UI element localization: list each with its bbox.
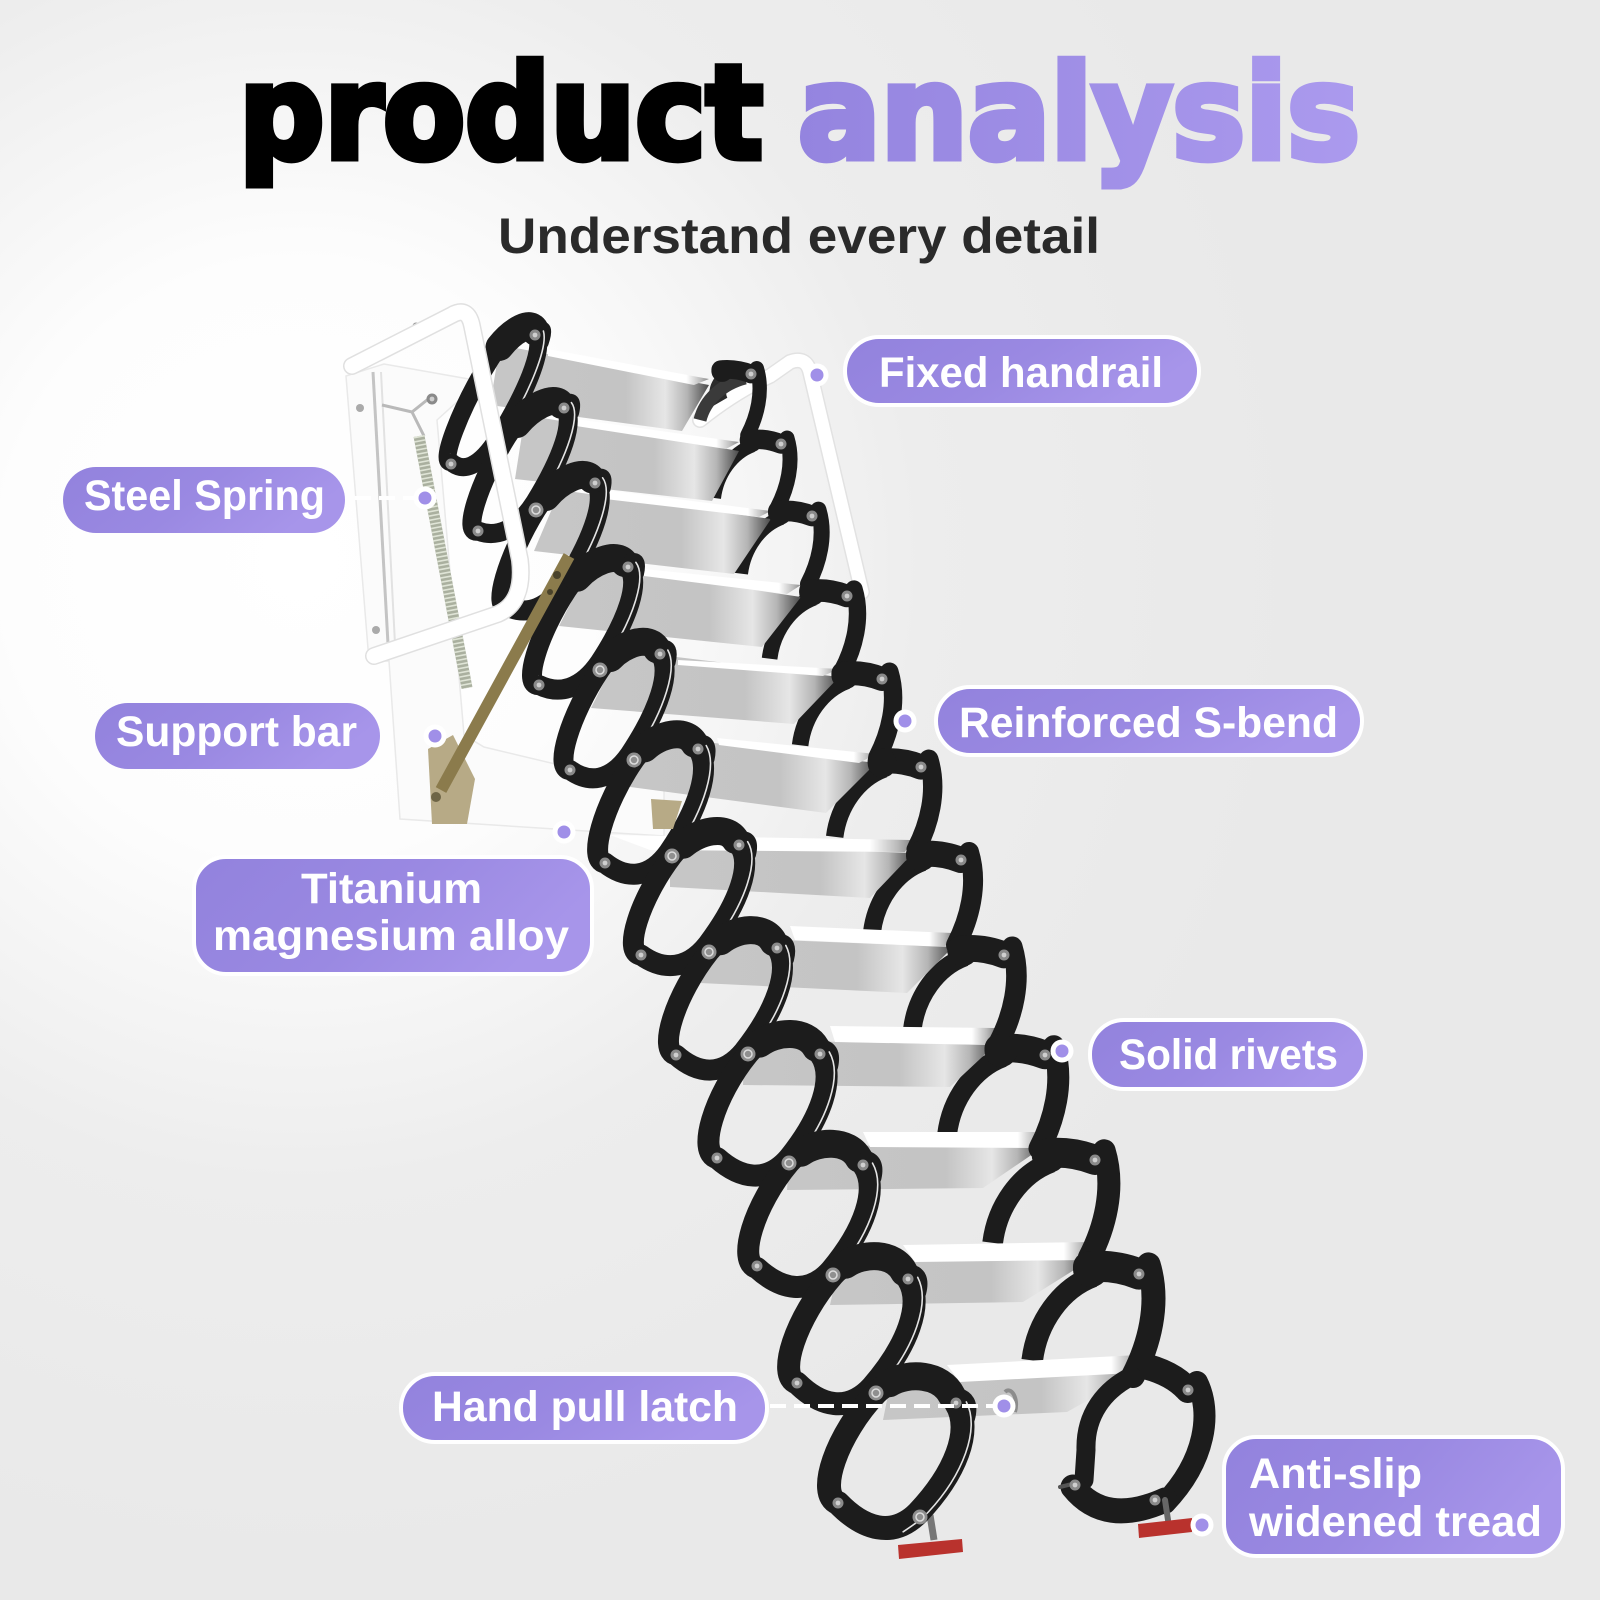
title: product	[239, 37, 763, 189]
marker: Fixed handrail	[808, 366, 826, 384]
ladder treads	[490, 345, 1138, 1420]
marker: Support bar	[426, 727, 444, 745]
label: Reinforced S-bend: Reinforced S-bend	[959, 699, 1338, 747]
label: Anti-slip widened tread: widened tread	[1248, 1498, 1542, 1546]
label: Hand pull latch: Hand pull latch	[432, 1383, 738, 1431]
marker and leader: Steel Spring	[355, 489, 434, 507]
label: Solid rivets	[1090, 1020, 1365, 1089]
right side folding arcs	[700, 372, 1093, 1360]
label: Titanium magnesium alloy	[194, 857, 592, 974]
label: Titanium magnesium alloy: magnesium alloy	[213, 912, 569, 960]
label: Anti-slip widened tread	[1224, 1437, 1563, 1556]
steel spring	[382, 396, 467, 688]
subtitle: Understand every detail	[498, 208, 1100, 264]
right handrail	[700, 360, 862, 592]
label: Fixed handrail	[845, 337, 1199, 405]
marker: Reinforced S-bend	[896, 712, 914, 730]
left side oval rings	[433, 309, 989, 1536]
wall mounting panel	[346, 322, 664, 836]
label: Reinforced S-bend	[936, 687, 1362, 755]
label: Support bar	[95, 703, 380, 769]
marker and leader: Hand pull latch	[770, 1397, 1013, 1415]
label: Steel Spring	[63, 467, 345, 533]
marker: Titanium magnesium alloy	[555, 823, 573, 841]
label: Anti-slip widened tread: Anti-slip	[1249, 1450, 1422, 1498]
label: Solid rivets: Solid rivets	[1119, 1031, 1338, 1079]
title	[239, 37, 1360, 189]
title: analysis	[798, 37, 1360, 189]
last right ring with foot	[1060, 1376, 1204, 1538]
marker: Anti-slip widened tread	[1193, 1516, 1211, 1534]
label: Hand pull latch	[401, 1374, 767, 1442]
label: Titanium magnesium alloy: Titanium	[301, 865, 482, 913]
label: Fixed handrail: Fixed handrail	[879, 349, 1163, 397]
rivets	[426, 330, 1194, 1524]
left fixed handrail	[352, 312, 521, 656]
gold support bar and brackets	[428, 556, 682, 829]
label: Support bar: Support bar	[116, 708, 357, 756]
right side scissor arms	[711, 360, 1188, 1390]
attic ladder product illustration	[346, 309, 1204, 1559]
label: Steel Spring: Steel Spring	[84, 472, 325, 520]
foot of last left ring	[898, 1515, 963, 1559]
marker: Solid rivets	[1053, 1042, 1071, 1060]
